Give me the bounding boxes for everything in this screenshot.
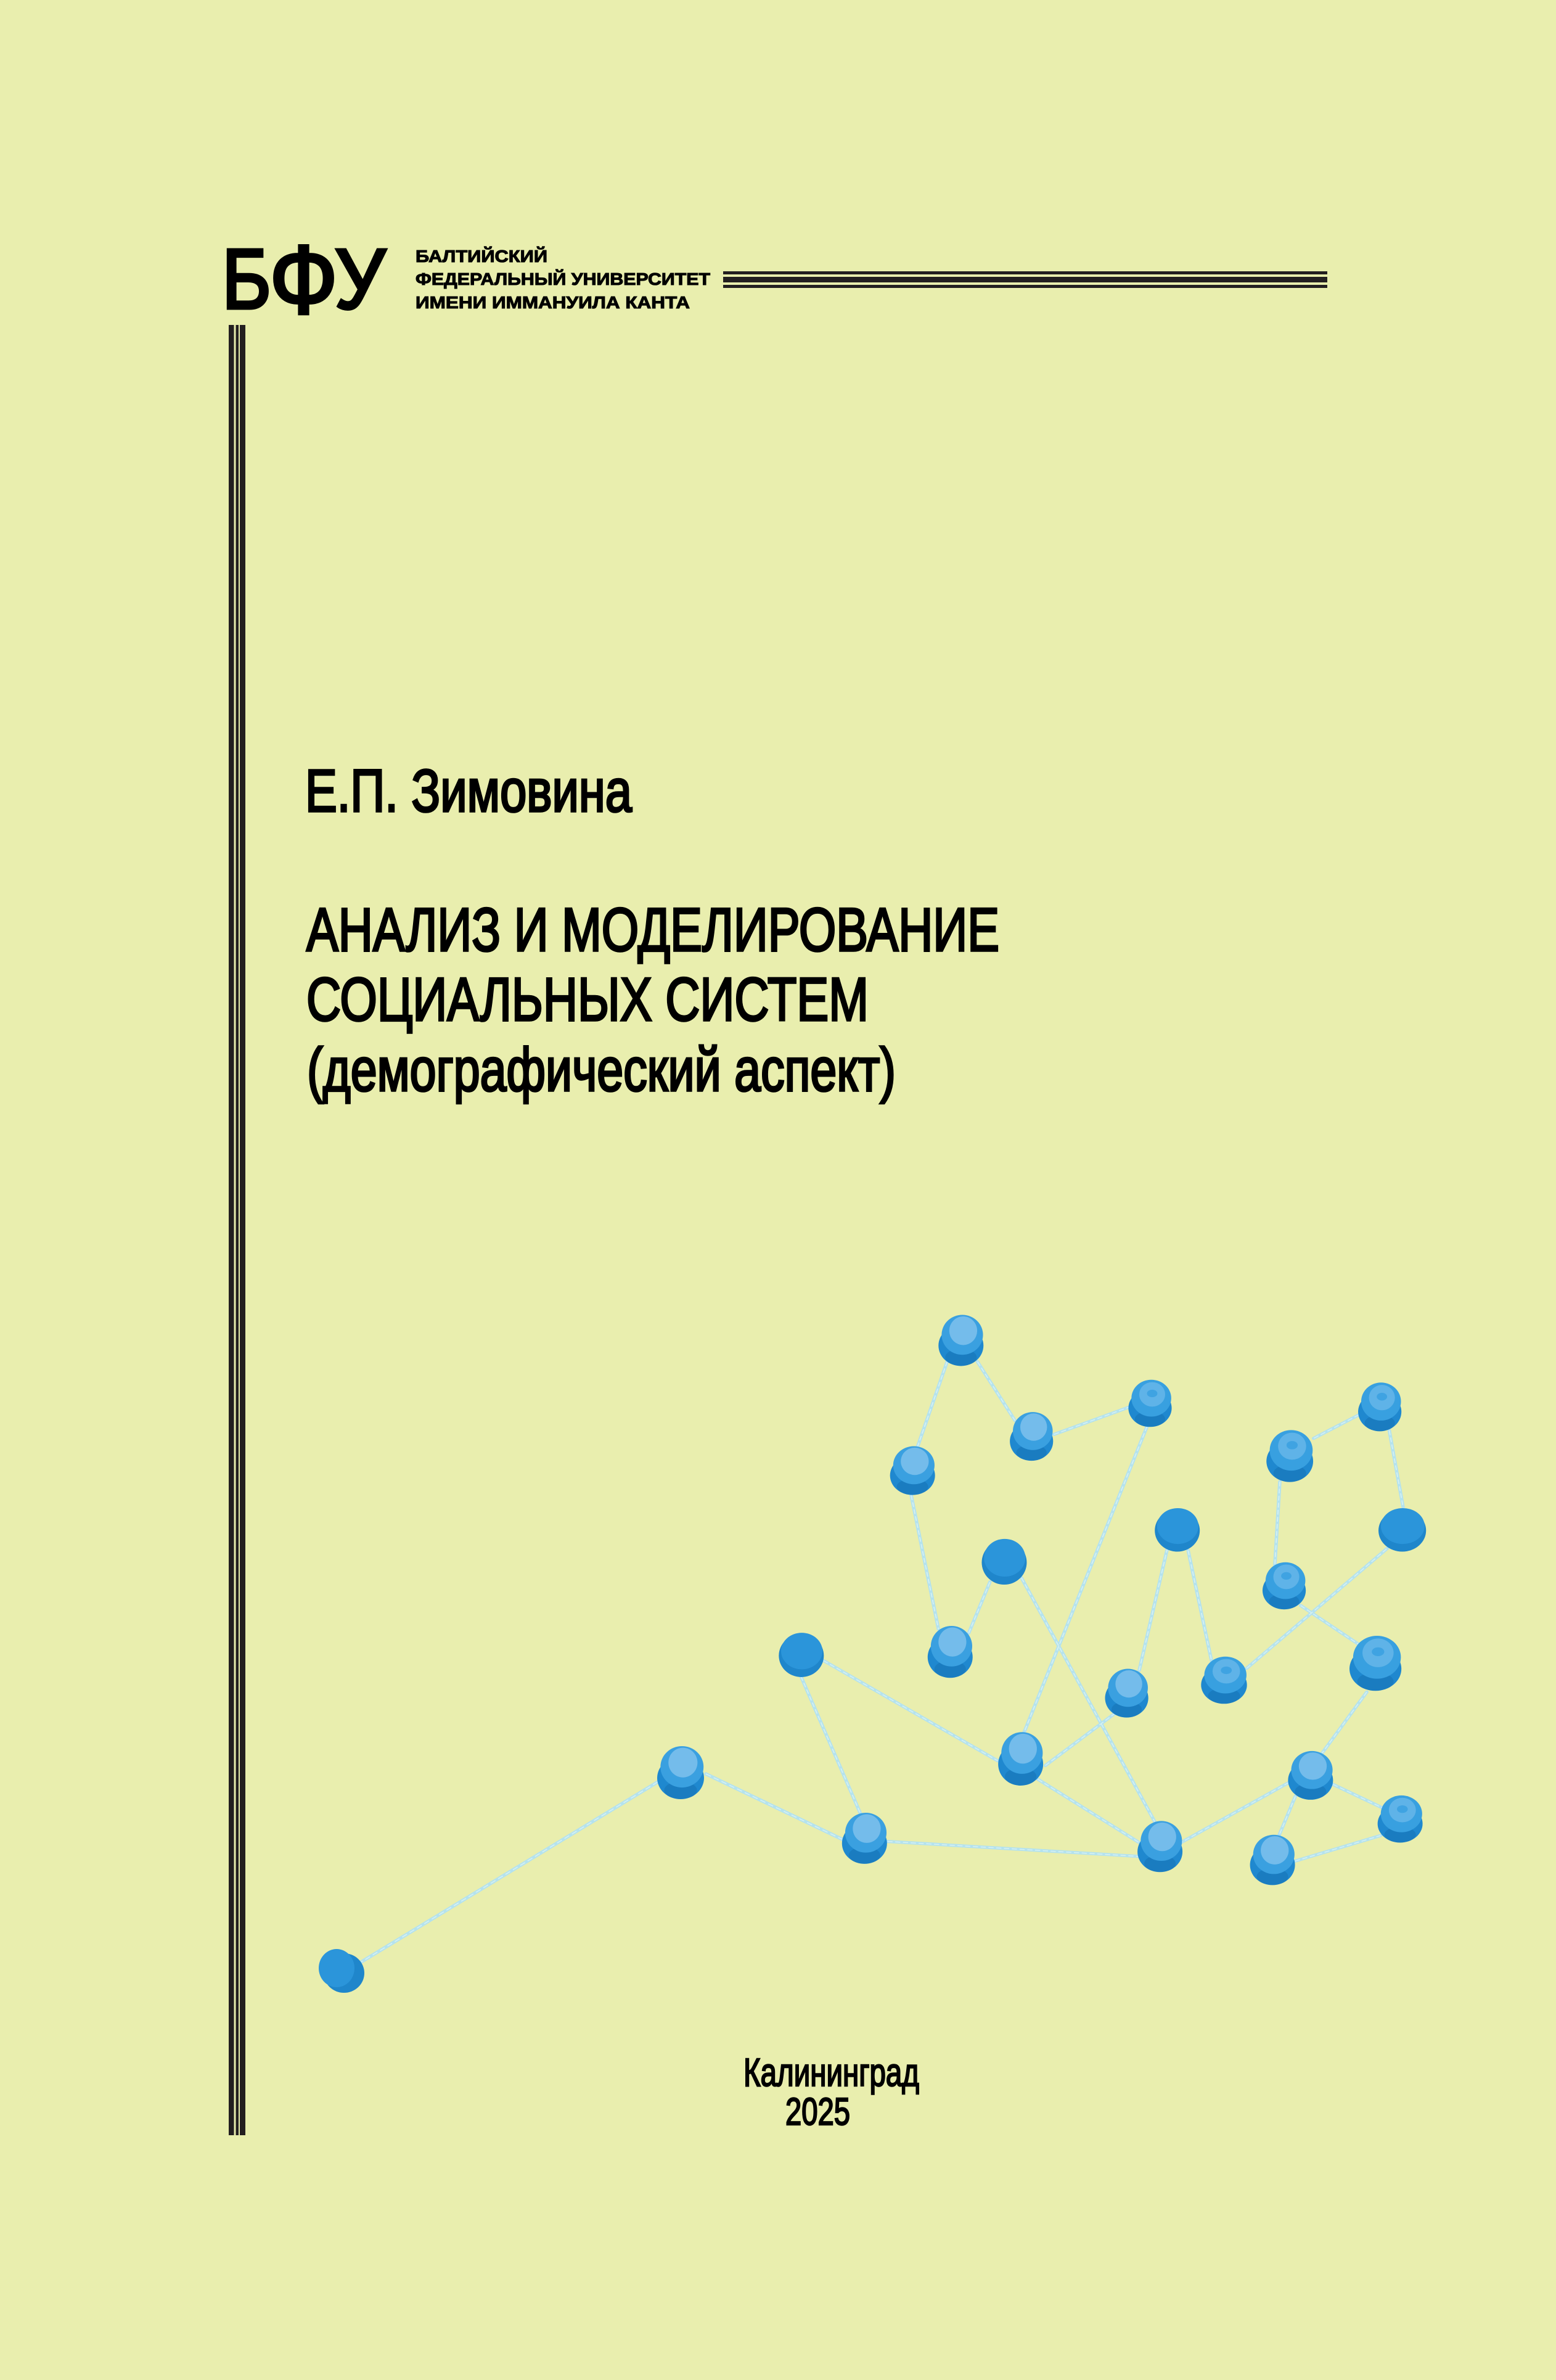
- university name: ФЕДЕРАЛЬНЫЙ УНИВЕРСИТЕТ: [416, 269, 710, 289]
- logo mark: БФУ: У: [335, 232, 386, 327]
- title: АНАЛИЗ И МОДЕЛИРОВАНИЕ: [306, 895, 999, 964]
- vertical triple rule: [229, 325, 245, 2135]
- author: Е.П. Зимовина: [305, 757, 632, 824]
- university name: [416, 246, 710, 312]
- university name: ИМЕНИ ИММАНУИЛА КАНТА: [416, 293, 690, 312]
- place of publication and year: [743, 2050, 919, 2133]
- logo mark: БФУ: Б: [222, 232, 271, 327]
- title: (демографический аспект): [307, 1035, 896, 1104]
- place of publication and year: 2025: [785, 2091, 850, 2133]
- strings: [801, 1361, 1403, 1861]
- pin network: [779, 1315, 1426, 1885]
- title: [306, 895, 999, 1104]
- pin: far left: [319, 1949, 364, 1993]
- pin: second from left: [657, 1746, 704, 1799]
- horizontal triple rule: [723, 271, 1327, 288]
- title: СОЦИАЛЬНЫХ СИСТЕМ: [306, 965, 869, 1033]
- pins: [779, 1315, 1426, 1885]
- place of publication and year: Калининград: [743, 2050, 919, 2095]
- illustration: pins and strings network: [319, 1315, 1426, 1993]
- logo mark: БФУ: Ф: [269, 226, 338, 334]
- university name: БАЛТИЙСКИЙ: [416, 246, 547, 266]
- logo mark: БФУ: [222, 226, 386, 334]
- long strings to the left: [361, 1774, 842, 1962]
